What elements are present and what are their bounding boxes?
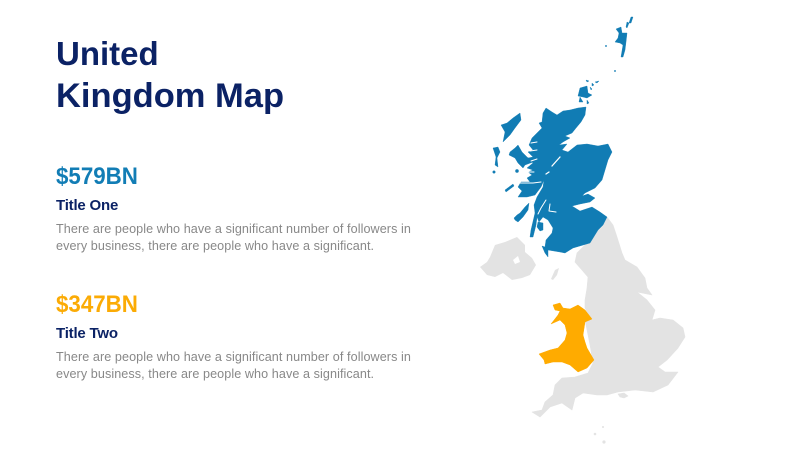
lochs and inlets bbox=[520, 142, 560, 214]
body text two: There are people who have a significant number of followers in bbox=[56, 350, 411, 364]
region: Scotland bbox=[493, 17, 633, 257]
body text one: There are people who have a significant number of followers in bbox=[56, 222, 411, 236]
value: $347BN: $347BN bbox=[56, 291, 138, 318]
body text two bbox=[56, 350, 411, 381]
title: Kingdom Map bbox=[56, 77, 284, 115]
region: Northern Ireland bbox=[480, 237, 536, 280]
body text two: every business, there are people who have a significant. bbox=[56, 367, 374, 381]
map of the United Kingdom bbox=[480, 17, 685, 443]
stat block: title two bbox=[56, 291, 411, 381]
body text one bbox=[56, 222, 411, 253]
heading: title two: Title Two bbox=[56, 325, 118, 342]
stat block: title one bbox=[56, 163, 411, 253]
region: Isle of Man bbox=[551, 268, 559, 280]
body text one: every business, there are people who have a significant. bbox=[56, 239, 374, 253]
region: Wales bbox=[539, 303, 594, 372]
region: England bbox=[532, 215, 685, 443]
title bbox=[56, 35, 284, 115]
value: $579BN: $579BN bbox=[56, 163, 138, 190]
heading: title one: Title One bbox=[56, 197, 118, 214]
title: United bbox=[56, 35, 159, 72]
